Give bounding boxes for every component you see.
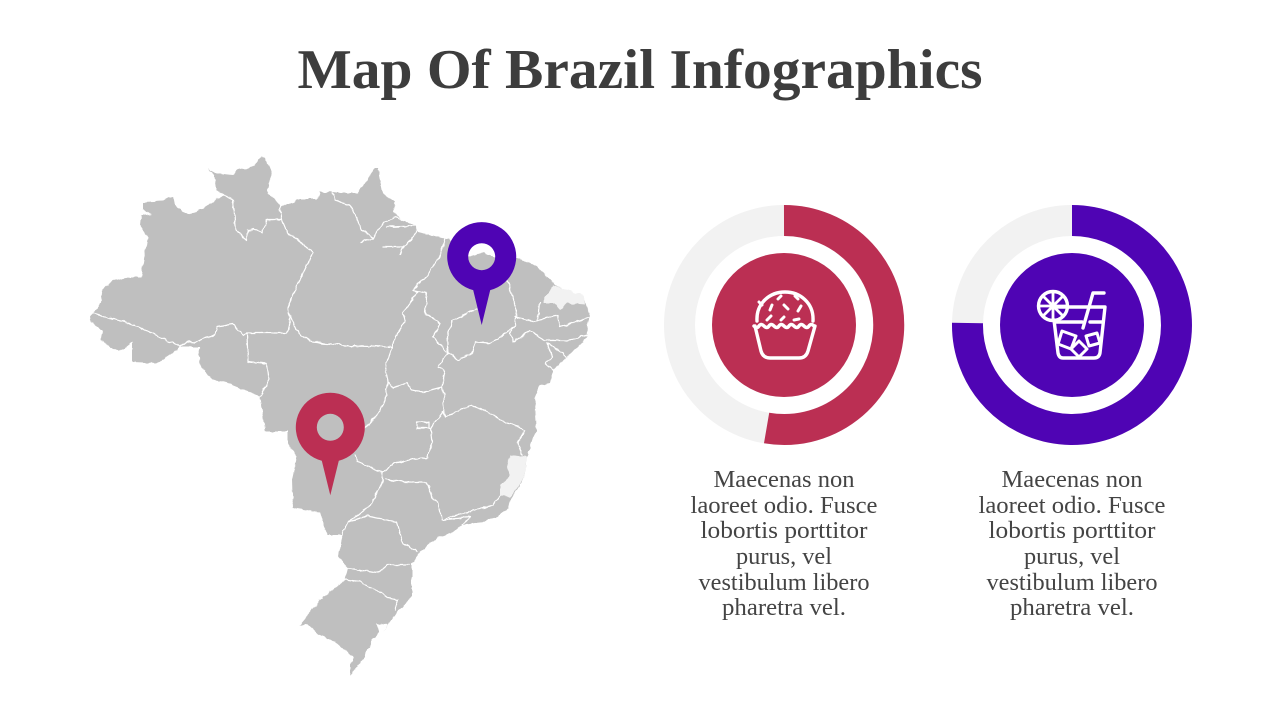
panel: purple donut [967,220,1176,430]
text block: crimson: pharetra vel. [722,595,846,621]
text block: crimson: purus, vel [736,544,832,570]
country silhouette [90,157,589,675]
map pin: crimson [296,393,365,495]
text block: crimson: vestibulum libero [698,570,870,596]
map of Brazil [90,157,589,675]
icon: cupcake [754,292,815,358]
inner disc [1000,253,1144,397]
text block: crimson: Maecenas non [714,467,854,493]
text block: purple: pharetra vel. [1010,595,1134,621]
inner disc [712,253,856,397]
icon: iced drink [1038,292,1105,358]
state borders [93,193,588,610]
text block: purple: purus, vel [1024,544,1120,570]
donut track [968,220,1176,430]
state: Espirito Santo [500,455,527,497]
text block: purple: vestibulum libero [986,570,1158,596]
text block: crimson: laoreet odio. Fusce [690,493,878,519]
title: Map Of Brazil Infographics [298,39,982,101]
lagoon [368,623,388,650]
text block: purple: lobortis porttitor [988,518,1156,544]
panel: crimson donut [680,220,889,430]
text block: purple: laoreet odio. Fusce [978,493,1166,519]
text block: purple [978,467,1166,621]
donut track [680,220,888,430]
state: Rio Grande do Norte [542,285,585,310]
map pin: purple [447,222,516,325]
text block: crimson: lobortis porttitor [700,518,868,544]
donut value arc [967,220,1176,430]
donut value arc [767,220,889,429]
text block: purple: Maecenas non [1002,467,1142,493]
text block: crimson [690,467,878,621]
